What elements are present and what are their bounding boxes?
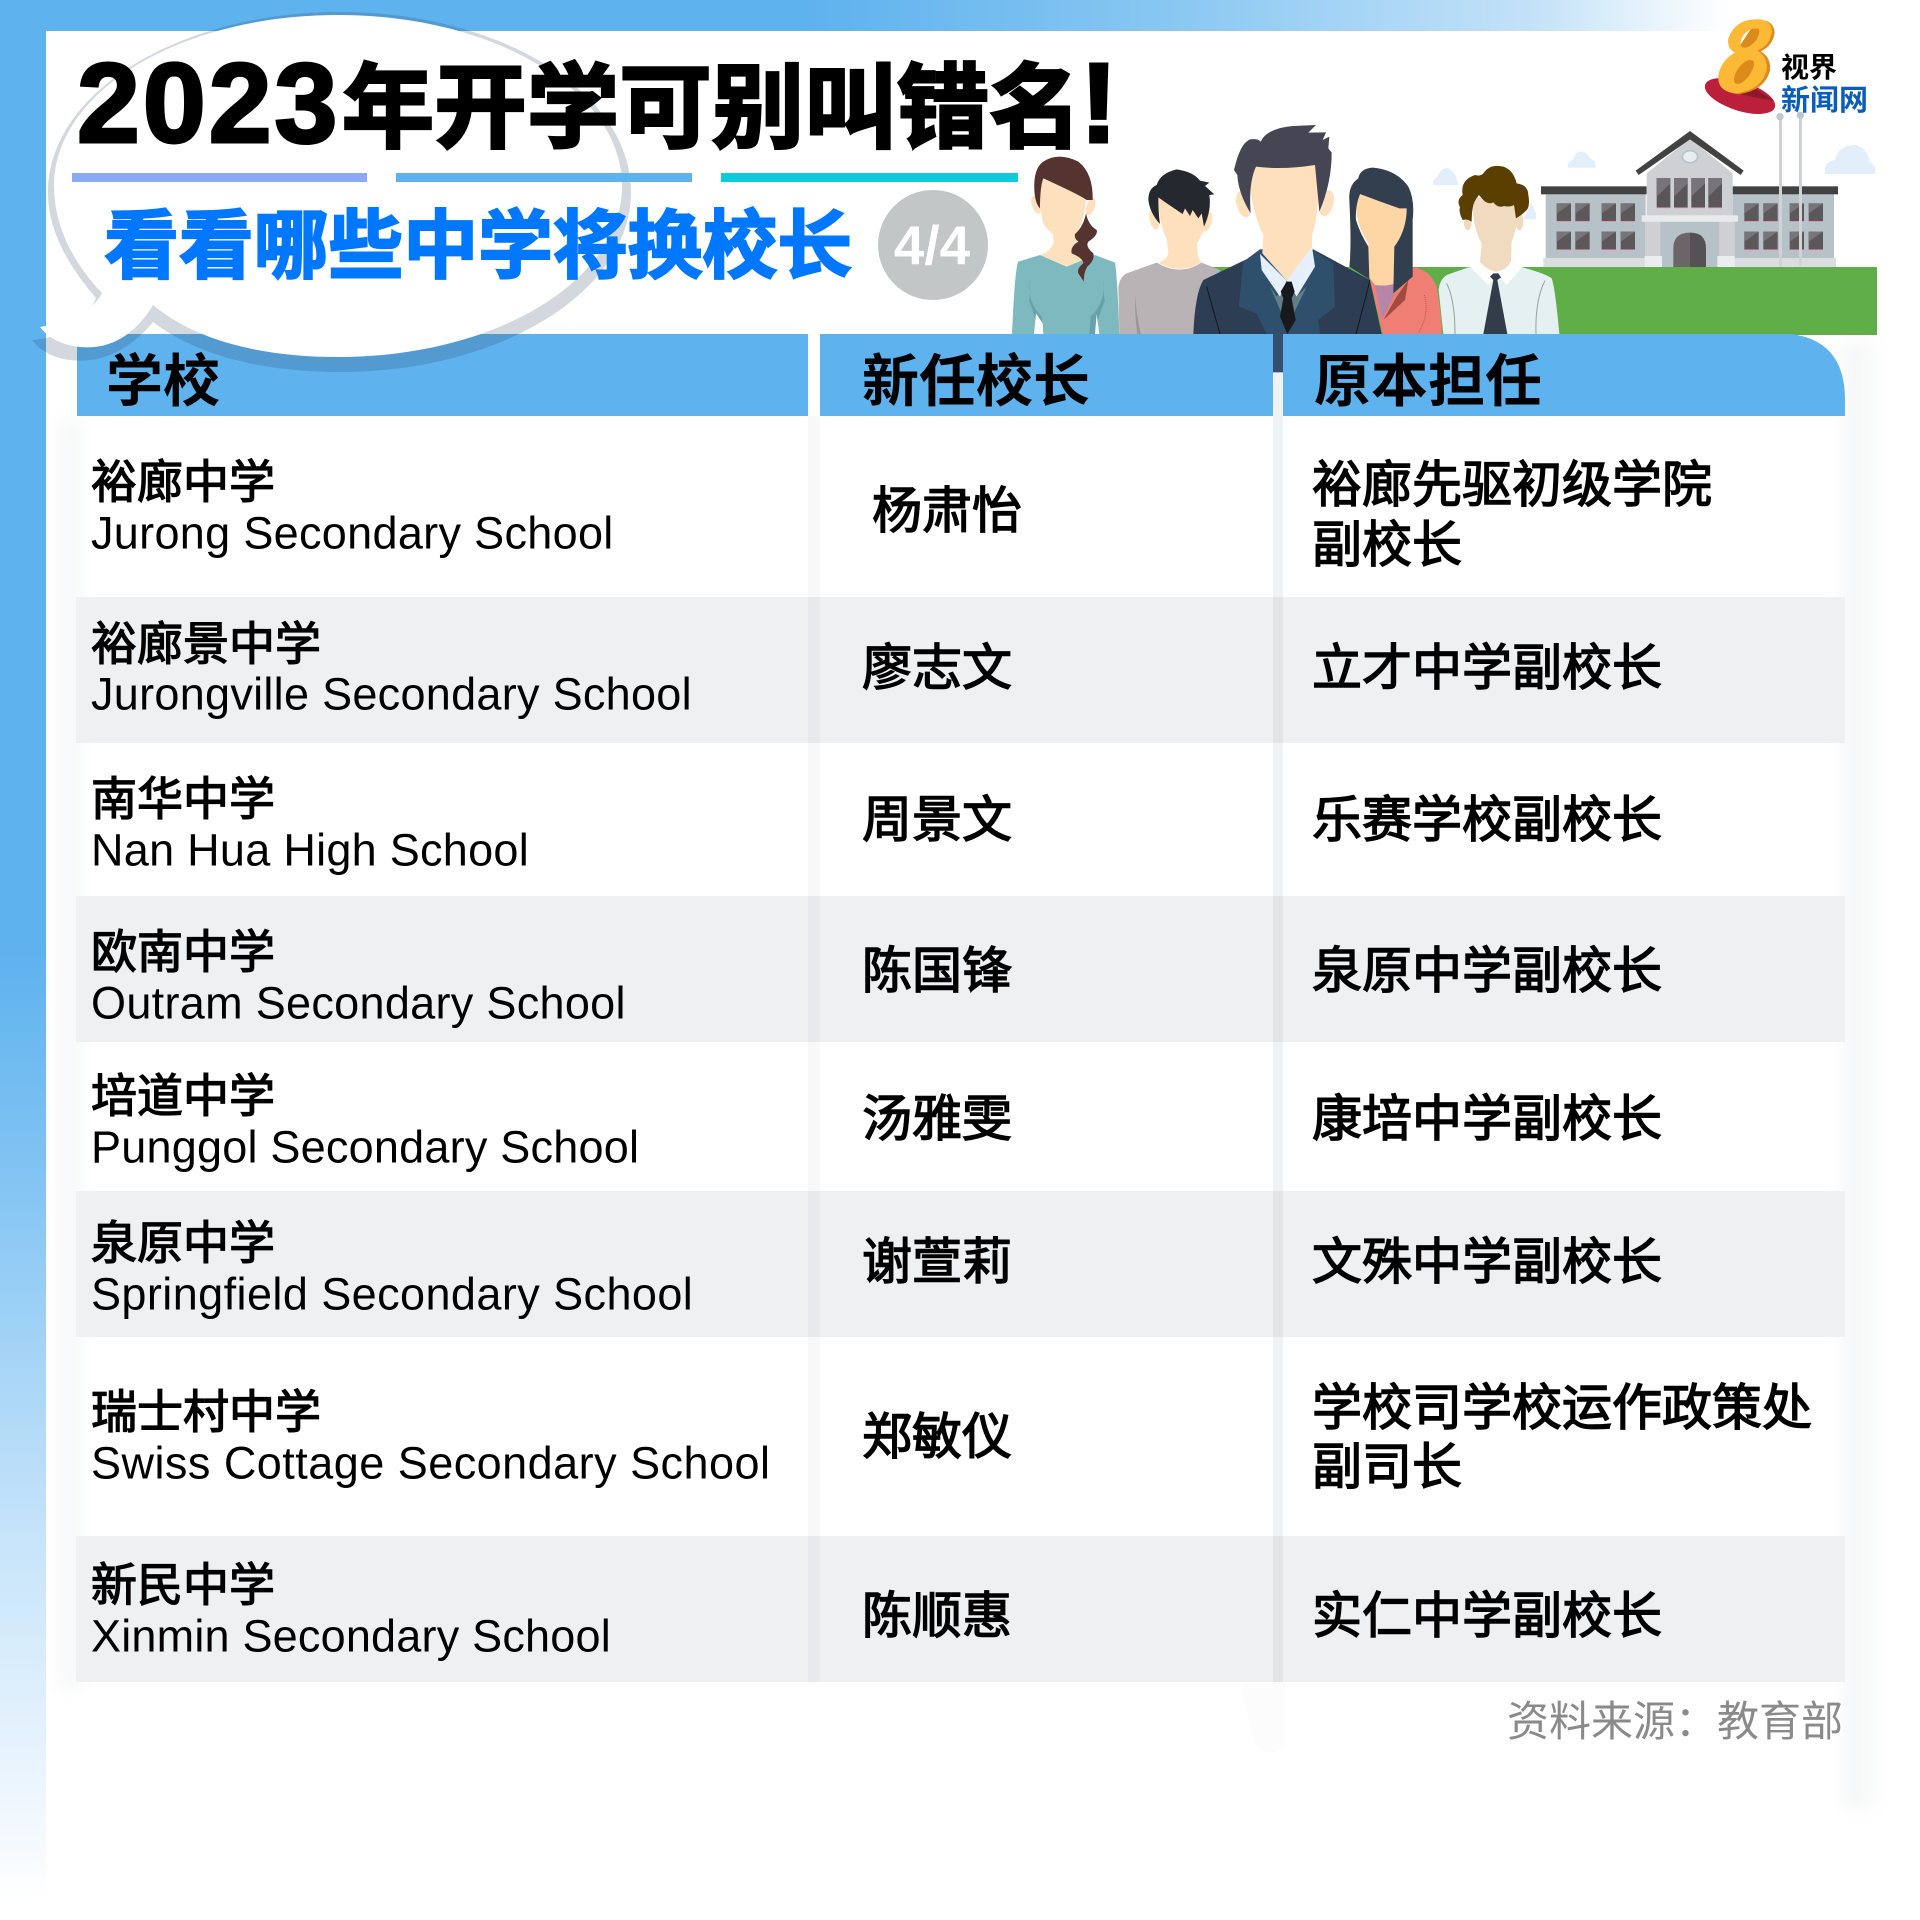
- row 1: 裕廊中学: [91, 456, 275, 508]
- logo text: news: 新闻网: [1781, 84, 1868, 117]
- icon: woman in coral jacket: [1349, 168, 1442, 334]
- row 1: [91, 456, 1712, 573]
- row 2: 廖志文: [862, 640, 1012, 696]
- row 1: 杨肃怡: [872, 483, 1022, 539]
- bubble shadow: [32, 12, 631, 372]
- row 1: 裕廊先驱初级学院: [1312, 457, 1712, 513]
- icon: clouds behind staff: [1433, 168, 1536, 219]
- illustration: lawn, school and staff: [1012, 112, 1877, 372]
- row 3: 乐赛学校副校长: [1312, 792, 1662, 848]
- table header labels: 新任校长: [862, 350, 1090, 414]
- icon: woman with ponytail: [1012, 157, 1119, 334]
- icon: school building: [1530, 112, 1875, 267]
- row 6: [91, 1217, 1662, 1320]
- row 7: 瑞士村中学: [91, 1386, 321, 1438]
- row 6: 泉原中学: [91, 1217, 275, 1269]
- title text: 年开学可别叫错名: [342, 58, 1082, 160]
- table header bar: [77, 334, 1845, 416]
- row 7: [91, 1380, 1812, 1495]
- row 2: 立才中学副校长: [1312, 640, 1662, 696]
- table header labels: 原本担任: [1314, 350, 1542, 414]
- row 7: 副司长: [1312, 1439, 1462, 1495]
- title: [72, 40, 1118, 300]
- row 3: 周景文: [862, 792, 1012, 848]
- bubble fill: [40, 15, 622, 357]
- row 4: Outram Secondary School: [91, 978, 626, 1028]
- row 2: 裕廊景中学: [91, 618, 321, 670]
- title text: !: [1080, 40, 1118, 166]
- row 6: Springfield Secondary School: [91, 1268, 693, 1320]
- source note: 资料来源：教育部: [1507, 1698, 1843, 1745]
- table header labels: [106, 350, 1542, 414]
- row 1: Jurong Secondary School: [91, 508, 613, 558]
- row 5: 汤雅雯: [862, 1091, 1012, 1147]
- row 5: 康培中学副校长: [1312, 1091, 1662, 1147]
- row 2: [91, 618, 1662, 720]
- row 7: 学校司学校运作政策处: [1312, 1380, 1812, 1436]
- row 4: 泉原中学副校长: [1312, 943, 1662, 999]
- page badge 4/4: [878, 190, 988, 300]
- table header labels: 学校: [106, 350, 220, 414]
- icon: principal in suit: [1193, 125, 1382, 372]
- row 4: 陈国锋: [862, 943, 1012, 999]
- row 3: 南华中学: [91, 773, 275, 825]
- table rows: [76, 372, 1845, 1752]
- row 3: Nan Hua High School: [91, 824, 529, 876]
- page badge 4/4: 4/4: [894, 214, 971, 276]
- logo: 8world news: [1701, 19, 1868, 121]
- row 5: Punggol Secondary School: [91, 1122, 639, 1172]
- icon: man in grey sweater: [1118, 169, 1220, 334]
- row 8: 实仁中学副校长: [1312, 1588, 1662, 1644]
- row 7: Swiss Cottage Secondary School: [91, 1438, 770, 1488]
- row 3: [91, 773, 1662, 876]
- row 4: [91, 926, 1662, 1028]
- row 6: 谢萱莉: [862, 1234, 1012, 1290]
- title underline bars: [72, 173, 1018, 182]
- row 8: Xinmin Secondary School: [91, 1610, 611, 1662]
- row 8: [91, 1559, 1662, 1662]
- row 5: 培道中学: [91, 1070, 275, 1122]
- speech bubble behind title: [32, 12, 631, 372]
- icon: gold 8 on red disc: [1701, 19, 1779, 121]
- row 2: Jurongville Secondary School: [91, 668, 692, 720]
- row 8: 新民中学: [91, 1559, 275, 1611]
- lawn: [1200, 267, 1877, 335]
- row 5: [91, 1070, 1662, 1172]
- row 6: 文殊中学副校长: [1312, 1234, 1662, 1290]
- title text: 2023: [77, 40, 340, 166]
- row 4: 欧南中学: [91, 926, 275, 978]
- row 8: 陈顺惠: [862, 1588, 1012, 1644]
- row 1: 副校长: [1312, 517, 1462, 573]
- subtitle: 看看哪些中学将换校长: [104, 204, 852, 288]
- row 7: 郑敏仪: [862, 1409, 1012, 1465]
- icon: man in white shirt: [1439, 166, 1559, 334]
- logo text: 视界: [1781, 52, 1837, 83]
